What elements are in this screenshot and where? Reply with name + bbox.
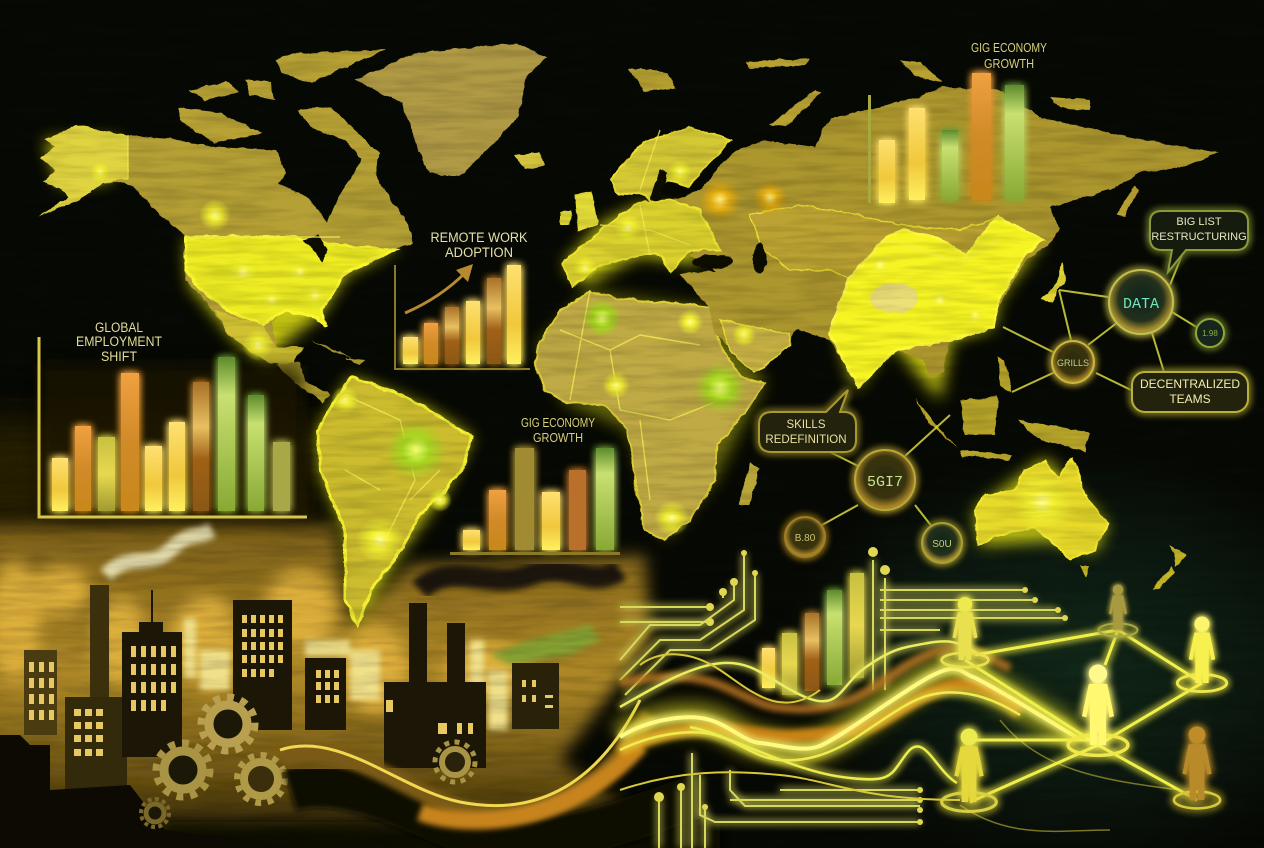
axis [868,95,871,203]
bars [52,357,290,511]
country borders [128,130,1000,540]
bubble: small value: 1.98 [1202,329,1218,338]
Central America [276,362,330,402]
continent: Australia [975,458,1107,558]
flowing waves [620,641,1180,831]
hotspots [90,160,1072,564]
Alaska highlight [38,125,128,217]
Madagascar [738,462,760,505]
heading: remote work adoption: REMOTE WORK [430,230,528,245]
Mexico [214,310,303,367]
callout: skills redefinition: SKILLS [786,419,826,431]
heading: gig economy growth upper: GROWTH [984,56,1034,71]
person [942,728,996,811]
dark seas [302,170,766,273]
bars [879,73,1024,203]
chart: gig economy growth upper [868,40,1047,203]
dark lines [960,720,1180,831]
bubble: grills: GRILLS [1057,358,1089,368]
US highlight [186,237,395,327]
person [1174,726,1220,808]
heading: global employment shift: EMPLOYMENT [76,334,162,349]
continent: Asia and eastern Europe [660,87,1218,387]
heading: global employment shift: GLOBAL [95,320,143,335]
person [942,597,988,667]
callout: restructuring [1150,211,1248,272]
Central Asia [750,205,1000,280]
bubble: grills [1052,341,1094,383]
callout: decentralized teams: DECENTRALIZED [1140,377,1240,391]
continent: Africa [535,292,765,540]
bubble: skill [855,450,915,510]
arctic islands [179,50,386,173]
axes [39,337,307,517]
callout: restructuring: BIG LIST [1176,216,1222,228]
second wave [620,692,1020,760]
person [1098,584,1138,636]
wave glow [620,669,1076,749]
bubble: small right [922,523,962,563]
chart backdrop [40,365,302,515]
orange band [620,648,1010,709]
callout: decentralized teams [1132,372,1248,412]
network: data bubbles [759,211,1248,563]
warm brush patches [0,560,534,714]
painted industrial ground [0,525,720,848]
Tibet [871,283,919,313]
circuit pads [654,547,1068,825]
painted wave bands [280,700,700,841]
heading: gig economy growth upper [971,40,1047,71]
bars [403,265,521,364]
axis [450,552,620,555]
gear [141,799,169,827]
upper wave [620,641,977,707]
Scandinavia [610,127,731,200]
gear [435,742,475,782]
continent: South America [318,377,472,625]
foreground silhouette [0,735,300,848]
buildings [24,585,559,792]
Japan [1040,262,1066,302]
heading: remote work adoption [430,230,528,260]
heading: global employment shift: SHIFT [101,349,137,364]
person [1068,664,1128,755]
building windows [29,615,553,756]
orange band [620,685,1020,752]
gears [141,697,475,827]
heading: gig economy growth lower [521,416,596,445]
callout: skills redefinition: REDEFINITION [765,434,847,446]
heading: global employment shift [76,320,162,364]
bars [463,448,614,550]
bubble: small value [1196,319,1224,347]
arrow: rising trend [405,264,473,313]
Arabia [720,320,790,373]
New Zealand and Tasmania [1080,545,1186,590]
chart: remote work adoption [395,230,530,369]
world map [38,43,1218,625]
network links [965,630,1202,802]
continent: Greenland [355,43,548,177]
China highlight [830,217,1043,387]
person [1177,616,1227,692]
industrial skyline [0,585,559,848]
Arctic Eurasian islands [628,58,1138,217]
gear [237,755,285,803]
callout: skills redefinition [759,390,856,452]
Caribbean [310,340,365,365]
main wave [620,669,1076,749]
gear [201,697,255,751]
gear [156,743,210,797]
bubble: skill: 5GI7 [867,474,903,491]
yellow filaments [620,654,960,800]
continent glow layer [45,140,1107,625]
bubble: data [1109,270,1173,334]
background: lower-right green haze [780,450,1264,848]
UK and Ireland [560,192,598,232]
background: chart haze left [0,420,310,530]
heading: remote work adoption: ADOPTION [445,245,513,260]
dark smoke [420,570,620,590]
chart: lower right bars [762,573,864,695]
continent: North America [38,125,414,367]
bubble: data: DATA [1123,296,1159,313]
light smoke [106,530,212,575]
heading: gig economy growth upper: GIG ECONOMY [971,40,1047,55]
chart: gig economy growth lower [450,416,620,555]
cream highlights [184,618,508,730]
dark floor [160,822,720,848]
Iceland [514,152,545,170]
people network [942,584,1227,811]
chart: global employment shift [39,320,307,517]
bubble: small left [785,517,825,557]
callout: decentralized teams: TEAMS [1169,392,1211,406]
callout: restructuring: RESTRUCTURING [1151,231,1247,243]
bubble: small right: S0U [932,539,952,550]
circuit lines [620,553,1065,848]
green brush patch [490,625,600,665]
bubble: small left: B.80 [795,533,816,544]
connectors [822,255,1198,528]
Europe [563,200,720,287]
SE Asia islands [915,357,1090,460]
axes [395,265,530,369]
heading: gig economy growth lower: GROWTH [533,431,583,445]
heading: gig economy growth lower: GIG ECONOMY [521,416,596,430]
lower wave [690,727,957,783]
